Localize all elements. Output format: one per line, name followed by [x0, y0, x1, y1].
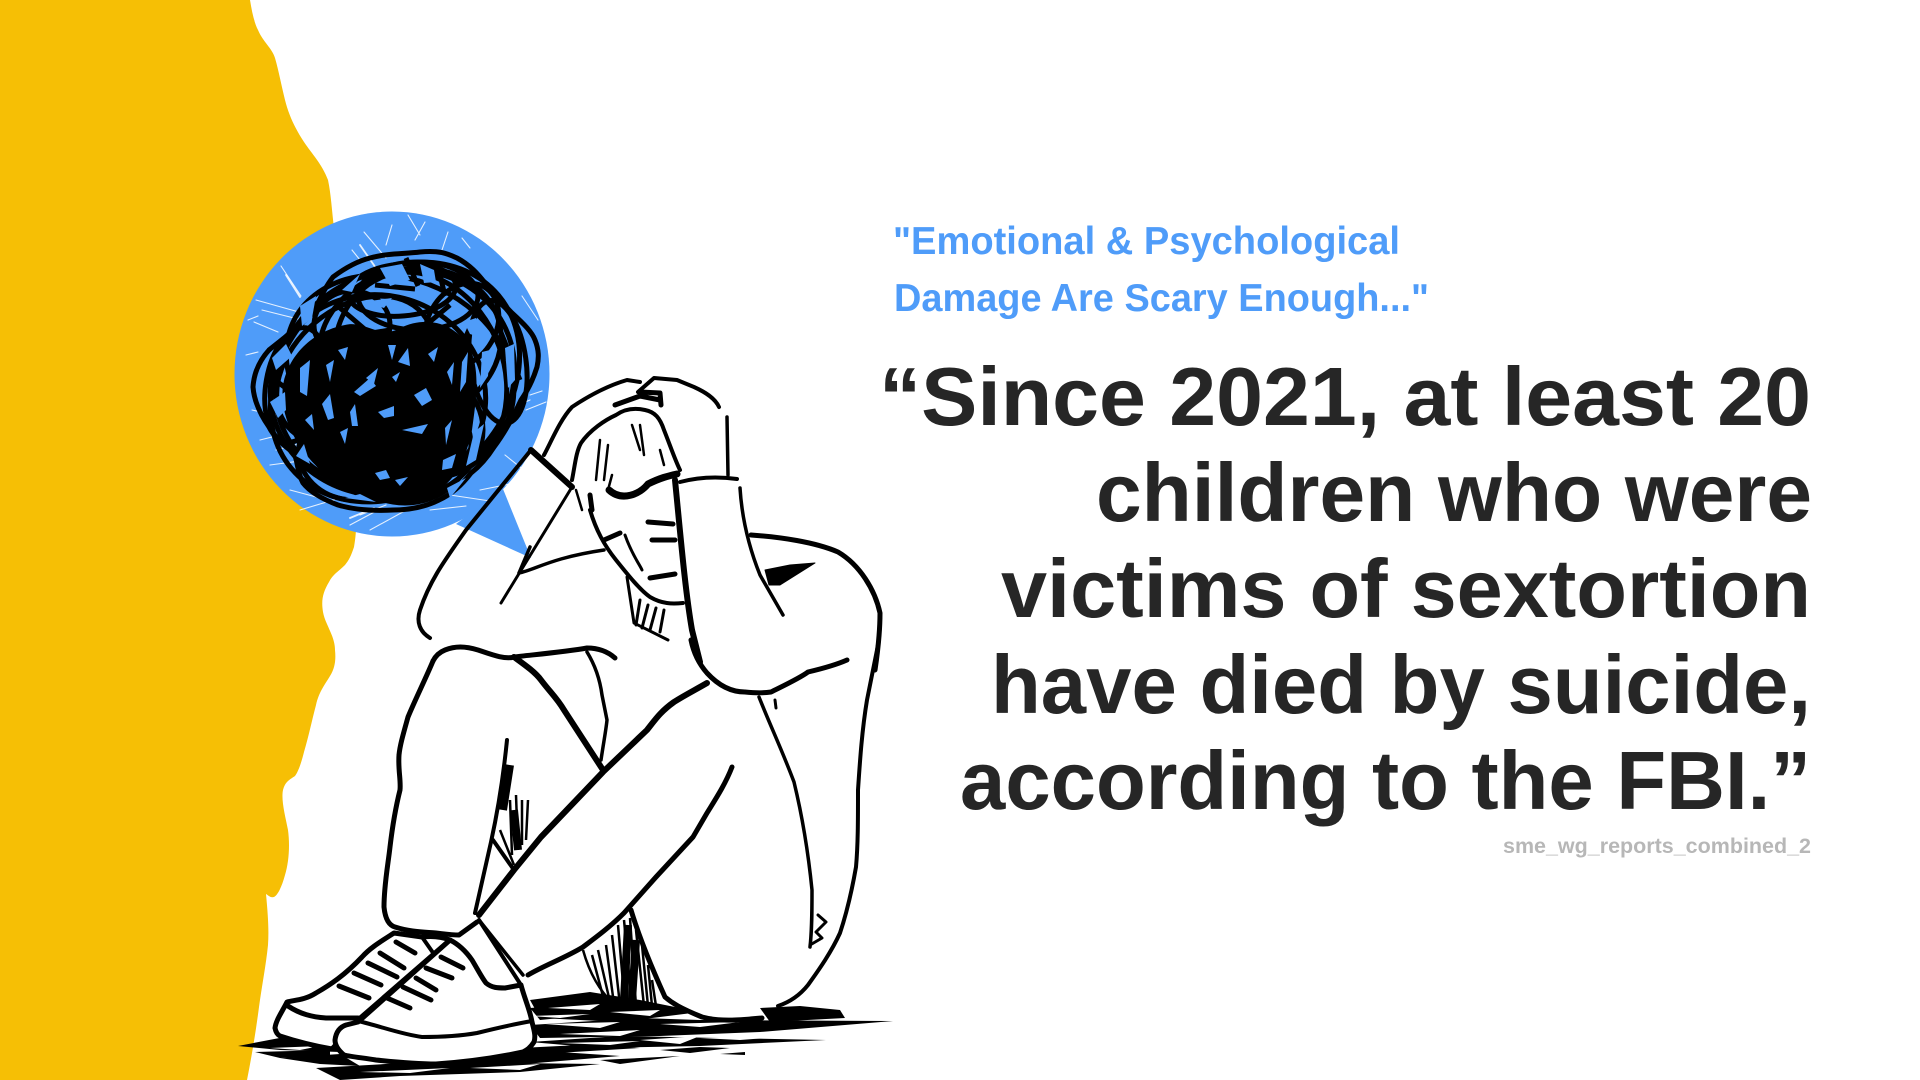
face: [590, 510, 683, 603]
tangled black scribble: [222, 212, 568, 552]
sneaker rear laces: [339, 942, 415, 998]
sweater back: [778, 640, 879, 1006]
subtitle: "Emotional & Psychological: [893, 220, 1400, 263]
panel: yellow torn-edge background: [0, 0, 356, 1080]
raised arm left outline: [418, 450, 531, 638]
main quote: have died by suicide,: [991, 638, 1811, 731]
sneaker front: [335, 920, 535, 1064]
dense scribble core: [282, 322, 476, 501]
scribble gaps: [270, 264, 515, 502]
subtitle: Damage Are Scary Enough...": [894, 277, 1429, 320]
hand on head: [544, 378, 719, 455]
sweater and legs white fill: [433, 640, 878, 1017]
sneaker front laces: [387, 957, 463, 1008]
closed eye: [609, 474, 677, 496]
head and hair: [572, 409, 680, 480]
seated body outlines: [384, 378, 880, 1020]
illustration: seated person holding head: [238, 378, 893, 1080]
speech bubble circle: [234, 212, 550, 536]
right arm: [740, 488, 783, 615]
bubble distress texture: [246, 215, 546, 530]
ground highlights: [270, 1004, 780, 1073]
icon: blue speech bubble with tangled scribble: [222, 212, 568, 558]
sweater hem: [691, 640, 847, 693]
speech bubble tail: [456, 489, 531, 558]
ground shadow streaks: [238, 992, 893, 1080]
front shin: [479, 683, 707, 915]
subtitle: [893, 220, 1429, 320]
main quote: victims of sextortion: [1001, 542, 1811, 635]
sneaker rear: [275, 933, 450, 1049]
main quote: [879, 350, 1812, 827]
shaded gaps behind knees: [500, 765, 656, 1006]
main quote: according to the FBI.”: [960, 734, 1811, 827]
main quote: “Since 2021, at least 20: [879, 350, 1811, 443]
source caption: sme_wg_reports_combined_2: [1503, 835, 1811, 858]
left thigh: [433, 647, 615, 661]
main quote: children who were: [1096, 446, 1812, 539]
cuff: [531, 450, 572, 487]
